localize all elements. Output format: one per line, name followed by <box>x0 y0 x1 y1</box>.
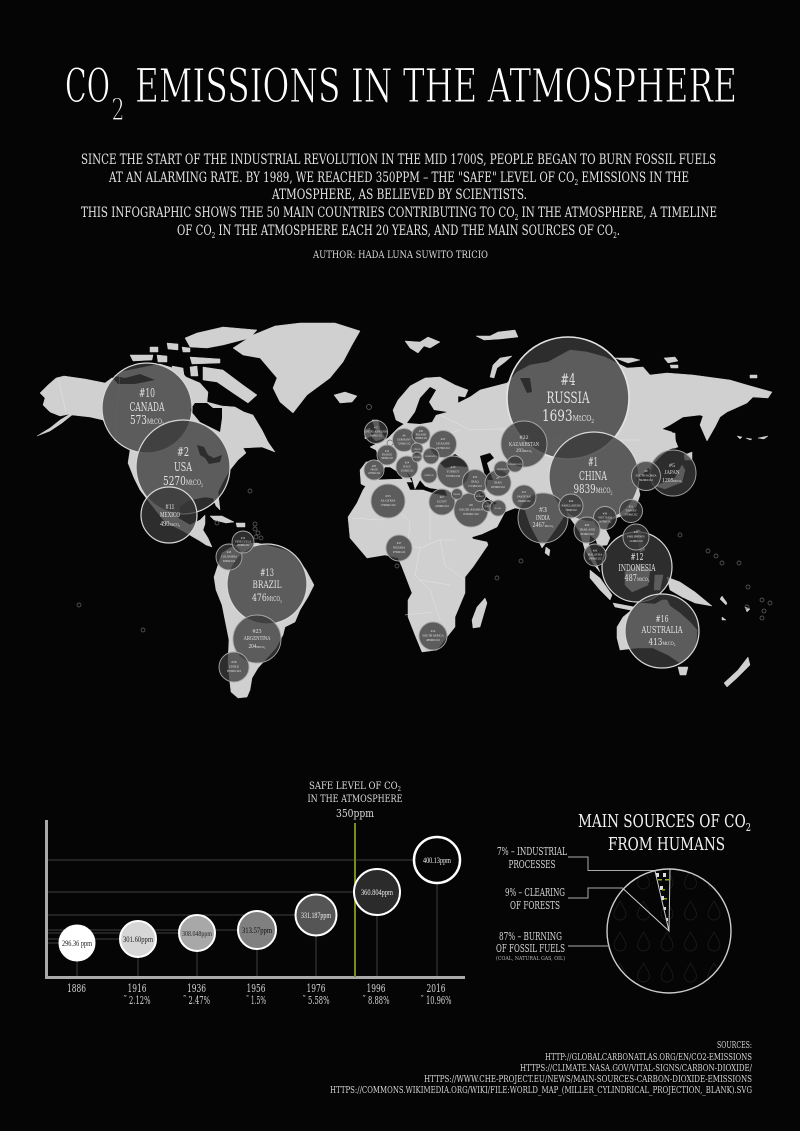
year labels: 1886 <box>67 982 86 995</box>
arctic russia islands <box>405 330 768 440</box>
bubble: china: CHINA <box>579 468 608 483</box>
axes <box>46 820 465 978</box>
bubble: iran <box>485 470 511 496</box>
point 2016 <box>414 837 460 883</box>
bubble: south korea <box>632 462 660 490</box>
bubble: chile <box>219 652 249 682</box>
bubble: uk: UNITED KINGDOM <box>365 430 388 434</box>
bubble: philippines: #37 <box>634 530 639 534</box>
bubble: iraq <box>462 470 488 494</box>
year labels: 1976 <box>306 982 326 995</box>
bubble: usa: USA <box>174 459 193 474</box>
bubble: turkmenistan: TURKMEN <box>497 469 508 471</box>
bubble: iran: 633MtCO2 <box>491 485 505 489</box>
bubble: kuwait <box>474 490 486 502</box>
madagascar <box>472 598 487 628</box>
year labels: ˜ 1.5% <box>246 994 266 1007</box>
bubble: france <box>377 445 397 465</box>
bubble: israel: ISRAEL <box>454 493 461 496</box>
iceland <box>334 392 357 403</box>
bubble: france: FRANCE <box>382 454 393 456</box>
bubble: italy: 352MtCO2 <box>401 470 414 472</box>
bubble: iraq: IRAQ <box>471 480 479 484</box>
bubble: ukraine: UKRAINE <box>436 442 450 446</box>
safe level line <box>354 823 356 977</box>
bubble: taiwan: 276MtCO2 <box>625 514 638 516</box>
eurasia <box>360 350 772 572</box>
bubble: italy: #24 <box>405 462 410 464</box>
bubble: malaysia: #26 <box>593 550 598 552</box>
country borders <box>58 372 640 640</box>
bubble: russia: #4 <box>560 371 576 389</box>
bubble: mexico: 2 <box>179 524 180 528</box>
asian and pacific islands <box>545 433 712 612</box>
bubble: taiwan: #21 <box>629 506 634 508</box>
bubble: argentina <box>233 615 281 663</box>
bubble: uae <box>490 500 506 516</box>
bubble: japan: 2 <box>681 481 683 484</box>
intro text block: EMISSIONS IN THE <box>578 170 689 186</box>
title: 2 <box>112 93 124 128</box>
source labels: 9% – CLEARING <box>505 886 565 899</box>
bubble: japan <box>650 450 696 496</box>
bubble: australia: 2 <box>674 643 676 647</box>
bubble: mexico: #11 <box>166 503 175 511</box>
bubble: uae: U.A.E. <box>495 507 502 510</box>
bubble: saudi arabia: #9 <box>469 503 473 507</box>
bubble: malaysia: 248MtCO2 <box>589 558 602 560</box>
bubble: japan: #5 <box>669 463 675 469</box>
title: CO <box>65 59 110 114</box>
bubble: bangladesh: #44 <box>569 500 574 503</box>
bubble: australia: #16 <box>656 614 668 625</box>
bubble: russia <box>507 337 629 459</box>
bubble: argentina: #23 <box>252 629 262 635</box>
year labels: ˜ 5.58% <box>302 994 330 1007</box>
year labels: 2016 <box>426 982 446 995</box>
year labels: 1936 <box>187 982 206 995</box>
bubble: russia: 2 <box>591 419 594 425</box>
industrial wedge <box>655 869 670 931</box>
bubble: venezuela: VENEZUELA <box>235 540 251 544</box>
bubble: turkey: 357MtCO2 <box>446 474 461 478</box>
hudson bay and great lakes <box>190 403 222 432</box>
bubble: uk: #17 <box>374 426 379 430</box>
point 2016: 400.13ppm <box>423 856 452 865</box>
bubble: algeria: 176MtCO2 <box>380 503 396 507</box>
intro text block: THIS INFOGRAPHIC SHOWS THE 50 MAIN COUNTRIES CONTRIBUTING TO CO <box>81 205 670 221</box>
bubble: ukraine: #25 <box>441 437 446 441</box>
intro text block: AT AN ALARMING RATE. BY 1989, WE REACHED 350PPM – THE "SAFE" LEVEL OF CO <box>109 170 743 186</box>
bubble: australia: AUSTRALIA <box>641 625 683 636</box>
bubble: poland: POLAND <box>416 434 426 436</box>
bubble: china: 2 <box>610 491 613 497</box>
bubble: turkey: TURKEY <box>447 470 460 474</box>
year labels: 1956 <box>246 982 266 995</box>
bubble: india <box>518 493 568 543</box>
australia <box>617 600 697 663</box>
bubble: mexico: MEXICO <box>160 511 180 519</box>
bubble: japan: 1205MtCO <box>662 478 681 484</box>
bubble: colombia: 92MtCO2 <box>223 559 236 563</box>
point 1916: 301.60ppm <box>123 935 154 944</box>
point 1886: 296.36 ppm <box>62 939 93 948</box>
arctic islands <box>185 327 257 348</box>
bubble: poland <box>412 426 430 444</box>
bubble: china: #1 <box>588 454 598 469</box>
bubble: nigeria: #47 <box>397 541 402 545</box>
bubble: pakistan: PAKISTAN <box>517 496 531 498</box>
point 1936 <box>179 915 215 951</box>
intro text block: 2 <box>574 178 578 187</box>
point 1956 <box>238 911 276 949</box>
bubble: germany: GERMANY <box>397 438 411 442</box>
point 1976 <box>296 894 336 936</box>
point 1886 <box>59 925 95 961</box>
bubble: greece: GREECE <box>424 474 434 477</box>
point 1996 <box>354 869 400 915</box>
bubble: poland: 203MtCO2 <box>415 437 428 440</box>
sources heading: FROM HUMANS <box>608 834 725 855</box>
intro text block: ATMOSPHERE, AS BELIEVED BY SCIENTISTS. <box>271 187 527 203</box>
bubble: kazakhstan <box>501 421 547 467</box>
source labels: OF FOSSIL FUELS <box>496 942 565 955</box>
intro text block <box>81 152 717 240</box>
bubble: ukraine <box>430 430 456 458</box>
bubble: germany <box>392 428 416 452</box>
source labels: 87% – BURNING <box>499 930 562 943</box>
bubble: iran: IRAN <box>494 480 502 484</box>
bubble: nigeria: 97MtCO2 <box>393 550 406 554</box>
africa <box>348 479 488 652</box>
bubble: argentina: 204MtCO <box>248 644 265 650</box>
bubble: colombia: #43 <box>227 550 232 554</box>
world map <box>37 323 772 698</box>
point 1976: 331.187ppm <box>301 911 332 920</box>
bubble: bangladesh <box>559 494 583 518</box>
bubble: uzbekistan <box>507 456 523 472</box>
bubble: south africa: #14 <box>431 629 436 633</box>
sources heading: MAIN SOURCES OF CO <box>578 811 800 832</box>
bubble: usa: 2 <box>201 483 203 489</box>
bubble: vietnam: VIET NAM <box>598 516 612 520</box>
intro text block: IN THE ATMOSPHERE EACH 20 YEARS, AND THE MAIN SOURCES OF CO <box>215 223 613 239</box>
bubble: venezuela <box>232 531 254 553</box>
intro text block: 2 <box>515 213 518 222</box>
bubble: taiwan: TAIWAN <box>626 510 636 512</box>
bubble: pakistan: #31 <box>522 491 527 494</box>
melanesia <box>720 596 750 620</box>
bubble: greece <box>421 467 437 483</box>
year labels: ˜ 2.47% <box>183 994 210 1007</box>
bubble: argentina: ARGENTINA <box>244 635 271 642</box>
bubble: spain: 247MtCO2 <box>368 472 381 475</box>
bubble: kazakhstan: KAZAKHSTAN <box>509 442 539 448</box>
year labels: 1916 <box>128 982 146 995</box>
bubble: usa: #2 <box>177 444 189 459</box>
bubble: turkey <box>437 456 469 488</box>
bubble: venezuela: #34 <box>241 537 246 540</box>
bubble: pakistan: 166MtCO2 <box>518 500 531 503</box>
point 1916 <box>120 921 156 957</box>
source labels: PROCESSES <box>508 858 556 871</box>
pie chart <box>607 869 731 993</box>
bubble: mexico <box>141 487 197 543</box>
bubble: thailand: 303MtCO2 <box>580 532 594 536</box>
bubble: egypt: #27 <box>440 495 445 499</box>
bubble: russia: 1693MtCO <box>542 407 597 425</box>
bubble: canada: #10 <box>139 385 155 400</box>
bubble: south korea: SOUTH KOREA <box>635 474 657 478</box>
bubble: india: #3 <box>539 506 548 514</box>
point 1996: 360.804ppm <box>361 888 394 897</box>
bubble: indonesia: INDONESIA <box>618 564 656 574</box>
bubble: turkmenistan <box>494 461 510 477</box>
bubble: germany: #6 <box>403 434 406 438</box>
bubble: italy: ITALY <box>403 466 411 468</box>
bubble: usa: 5270MtCO <box>163 473 207 488</box>
bubble: vietnam <box>594 506 616 530</box>
sources heading <box>578 811 751 855</box>
bubble: algeria: #33 <box>385 494 391 498</box>
bubble: canada: 2 <box>162 422 164 428</box>
sources list: SOURCES: <box>717 1040 752 1051</box>
bubble: thailand: #20 <box>585 523 590 527</box>
year labels: ˜ 8.88% <box>362 994 390 1007</box>
bubble: france: #19 <box>385 450 390 453</box>
bubble: spain: #28 <box>372 465 377 468</box>
bubble: uk: 398MtCO2 <box>370 434 383 438</box>
bubble: russia: RUSSIA <box>546 389 590 407</box>
bubble: philippines: PHILIPPINES <box>627 534 645 538</box>
bubble: brazil: 2 <box>280 598 282 604</box>
bubble: south africa: 489MtCO2 <box>426 638 440 642</box>
greenland <box>233 323 360 413</box>
author: AUTHOR: HADA LUNA SUWITO TRICIO <box>312 249 488 261</box>
bubble: mexico: 490MtCO <box>160 520 180 528</box>
bubble: chile: #39 <box>231 660 237 664</box>
intro text block: 2 <box>212 231 215 240</box>
bubble: pakistan <box>512 485 536 509</box>
bubble: brazil: 476MtCO <box>252 592 285 604</box>
south america <box>214 543 314 698</box>
bubble: brazil: BRAZIL <box>252 579 282 591</box>
bubble: south korea: #8 <box>644 469 648 473</box>
bubble: italy <box>396 456 418 478</box>
bubble: indonesia: 2 <box>648 579 650 583</box>
inland seas <box>407 387 447 424</box>
bubble: china: 9839MtCO <box>574 481 617 496</box>
bubble: ukraine: 227MtCO2 <box>436 446 450 450</box>
bubble: austria: AUSTRIA <box>413 456 422 459</box>
bubble: indonesia: 487MtCO <box>624 574 652 584</box>
bubble: thailand <box>574 517 600 543</box>
bubble: saudi arabia: 635MtCO2 <box>463 512 479 516</box>
year labels: ˜ 10.96% <box>420 994 452 1007</box>
bubble: malaysia <box>584 544 606 566</box>
bubble: spain <box>364 460 384 480</box>
bubble: spain: SPAIN <box>370 468 378 472</box>
bubble: south africa <box>419 622 447 650</box>
bubble: indonesia <box>602 532 672 602</box>
bubble: kuwait: KUWAIT <box>476 495 485 498</box>
bubble: kazakhstan: #22 <box>520 435 529 441</box>
intro text block: IN THE ATMOSPHERE, A TIMELINE <box>518 205 717 221</box>
year labels: 1996 <box>366 982 386 995</box>
bubble: israel <box>452 488 462 500</box>
bubble: iraq: 171MtCO2 <box>468 484 482 488</box>
bubble: venezuela: 165MtCO2 <box>237 544 250 547</box>
bubble: czech republic: CZECH <box>414 449 421 451</box>
safe level label: SAFE LEVEL OF CO <box>309 780 418 792</box>
small-state rings <box>77 404 772 632</box>
bubble: qatar: QATAR <box>485 505 492 508</box>
source labels: OF FORESTS <box>510 899 560 912</box>
bubble: saudi arabia: SAUDI ARABIA <box>459 508 484 512</box>
bubble: nigeria: NIGERIA <box>393 546 406 550</box>
timeline chart <box>46 820 465 1007</box>
bubble: bangladesh: BANGLADESH <box>562 504 580 508</box>
bubble: saudi arabia <box>454 493 488 527</box>
bubble: kazakhstan: 293MtCO <box>516 448 531 454</box>
bubble: philippines: 114MtCO2 <box>629 539 643 543</box>
north america <box>37 364 275 547</box>
bubble: romania <box>423 448 439 464</box>
bubble: france: 320MtCO2 <box>381 457 394 460</box>
source labels: 7% – INDUSTRIAL <box>497 845 567 858</box>
source labels: (COAL, NATURAL GAS, OIL) <box>496 955 565 962</box>
sources list <box>330 1040 753 1096</box>
safe level label: 350ppm <box>336 806 374 820</box>
point 1956: 313.57ppm <box>242 926 273 935</box>
tasmania and new zealand <box>678 657 750 687</box>
bubble: kazakhstan: 2 <box>531 451 533 454</box>
leader lines <box>568 857 655 946</box>
gridlines <box>48 860 437 977</box>
bubble: canada: CANADA <box>130 399 165 414</box>
bubble: colombia: COLOMBIA <box>221 554 238 558</box>
bubble: thailand: THAILAND <box>579 528 596 532</box>
bubble: qatar <box>482 500 494 512</box>
bubble: china <box>549 432 639 522</box>
bubble: malaysia: MALAYSIA <box>588 554 602 556</box>
intro text block: OF CO <box>177 223 225 239</box>
bubble: japan: JAPAN <box>664 470 680 476</box>
point 1936: 308.048ppm <box>182 930 212 938</box>
bubble: south korea: 592MtCO2 <box>639 478 653 482</box>
bubble: poland: #29 <box>419 430 424 433</box>
bubble: canada: 573MtCO <box>130 412 168 427</box>
bubble: vietnam: 167MtCO2 <box>599 520 612 524</box>
safe level label: 2 <box>398 785 401 793</box>
bubble: bangladesh: 73MtCO2 <box>565 509 577 512</box>
bubble: brazil: #13 <box>260 567 274 579</box>
bubble: egypt: 226MtCO2 <box>435 504 449 508</box>
bubble: taiwan <box>620 500 642 522</box>
bubble: usa <box>136 420 230 514</box>
bubble: uzbekistan: UZBEKISTAN <box>508 463 522 466</box>
bubble: indonesia: #12 <box>630 553 644 563</box>
bubble: india: 2467MtCO <box>532 521 554 529</box>
intro text block: . <box>617 223 620 239</box>
bubble: czech republic <box>411 443 423 455</box>
source labels <box>496 845 567 962</box>
bubble: romania: ROMANIA <box>425 455 437 458</box>
bubble: egypt <box>429 489 455 515</box>
bubble: india: INDIA <box>536 514 550 522</box>
uk and ireland <box>365 420 385 441</box>
bubble: turkey: #15 <box>451 465 456 469</box>
bubble: iran: #7 <box>496 476 500 480</box>
year labels <box>67 982 452 1007</box>
bubble: austria <box>412 452 422 462</box>
bubble: vietnam: #30 <box>603 512 608 516</box>
bubble: chile: 87MtCO2 <box>227 669 241 673</box>
bubble: chile: CHILE <box>229 664 239 668</box>
bubble: australia <box>625 594 699 668</box>
bubble: algeria <box>371 484 405 518</box>
bubble: nigeria <box>386 535 412 561</box>
bubble: brazil <box>227 544 307 624</box>
bubble: germany: 729MtCO2 <box>398 442 411 446</box>
intro text block: 2 <box>613 231 617 240</box>
year labels: ˜ 2.12% <box>124 994 151 1007</box>
bubble: philippines <box>623 524 649 550</box>
sources heading: 2 <box>746 821 751 834</box>
bubble: canada <box>102 363 192 453</box>
bubble: iraq: #32 <box>473 475 478 479</box>
bubble: australia: 413MtCO <box>648 637 677 648</box>
safe level label: IN THE ATMOSPHERE <box>308 793 402 805</box>
cuba and caribbean <box>210 516 245 527</box>
bubble: colombia <box>216 544 242 570</box>
bubble: egypt: EGYPT <box>437 500 447 504</box>
bubble: uk <box>364 420 388 444</box>
title <box>65 59 737 128</box>
bubble: india: 2 <box>552 526 554 529</box>
safe level label <box>308 780 402 820</box>
bubble: argentina: 2 <box>264 647 266 650</box>
bubble: south africa: SOUTH AFRICA <box>422 634 445 638</box>
bubble: algeria: ALGERIA <box>381 498 396 502</box>
